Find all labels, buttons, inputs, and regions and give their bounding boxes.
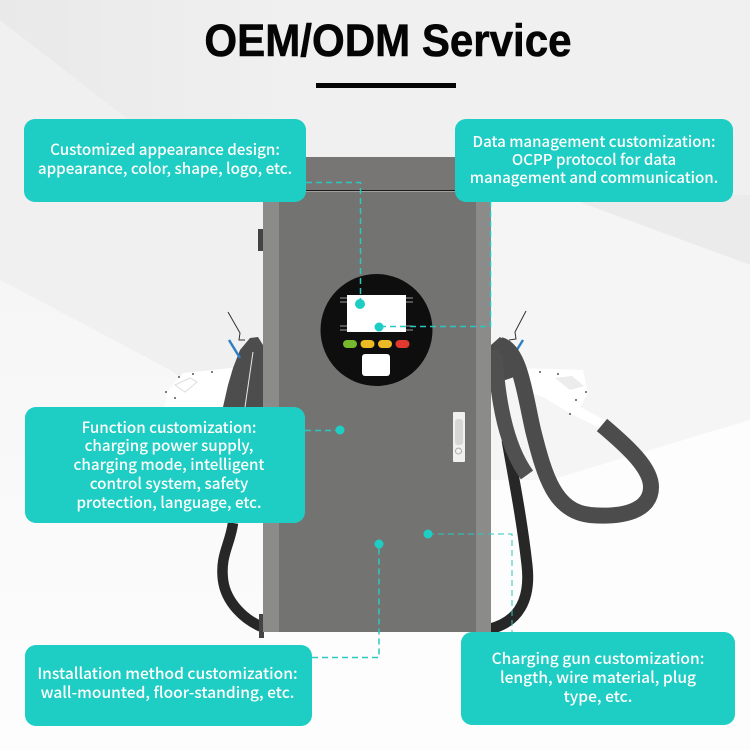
- callout: function customization: control system, safety: [90, 472, 248, 494]
- callout: appearance design: Customized appearance design:: [50, 138, 280, 160]
- callout: function customization: charging mode, intelligent: [74, 453, 264, 475]
- right charging gun and cable: [490, 311, 651, 629]
- callout connectors: [305, 182, 512, 658]
- callout: charging gun: [461, 632, 735, 725]
- callout: data management: OCPP protocol for data: [512, 148, 676, 170]
- callout: function customization: [25, 407, 305, 523]
- callout: function customization: Function customization:: [82, 416, 256, 438]
- charger cabinet: [258, 157, 491, 632]
- callout: function customization: protection, language, etc.: [76, 491, 262, 513]
- callout: charging gun: type, etc.: [564, 685, 632, 707]
- left charging gun and cable: [165, 312, 264, 638]
- callout: installation method: wall-mounted, floor-standing, etc.: [41, 680, 294, 702]
- callout: data management: Data management customization:: [473, 130, 715, 152]
- control panel: [320, 274, 432, 386]
- callout: function customization: charging power supply,: [85, 434, 253, 456]
- callout: charging gun: length, wire material, plug: [500, 666, 696, 688]
- callout: installation method: [25, 645, 312, 726]
- callout: data management: management and communication.: [470, 166, 718, 188]
- title: OEM/ODM Service: [204, 15, 572, 66]
- door handle: [453, 412, 465, 462]
- callout: appearance design: [24, 119, 306, 202]
- callout: appearance design: appearance, color, shape, logo, etc.: [38, 156, 292, 178]
- title underline: [316, 83, 456, 88]
- callout: data management: [455, 119, 733, 202]
- connector dots: [336, 299, 432, 548]
- callout: installation method: Installation method customization:: [37, 662, 298, 684]
- callout: charging gun: Charging gun customization:: [492, 647, 704, 669]
